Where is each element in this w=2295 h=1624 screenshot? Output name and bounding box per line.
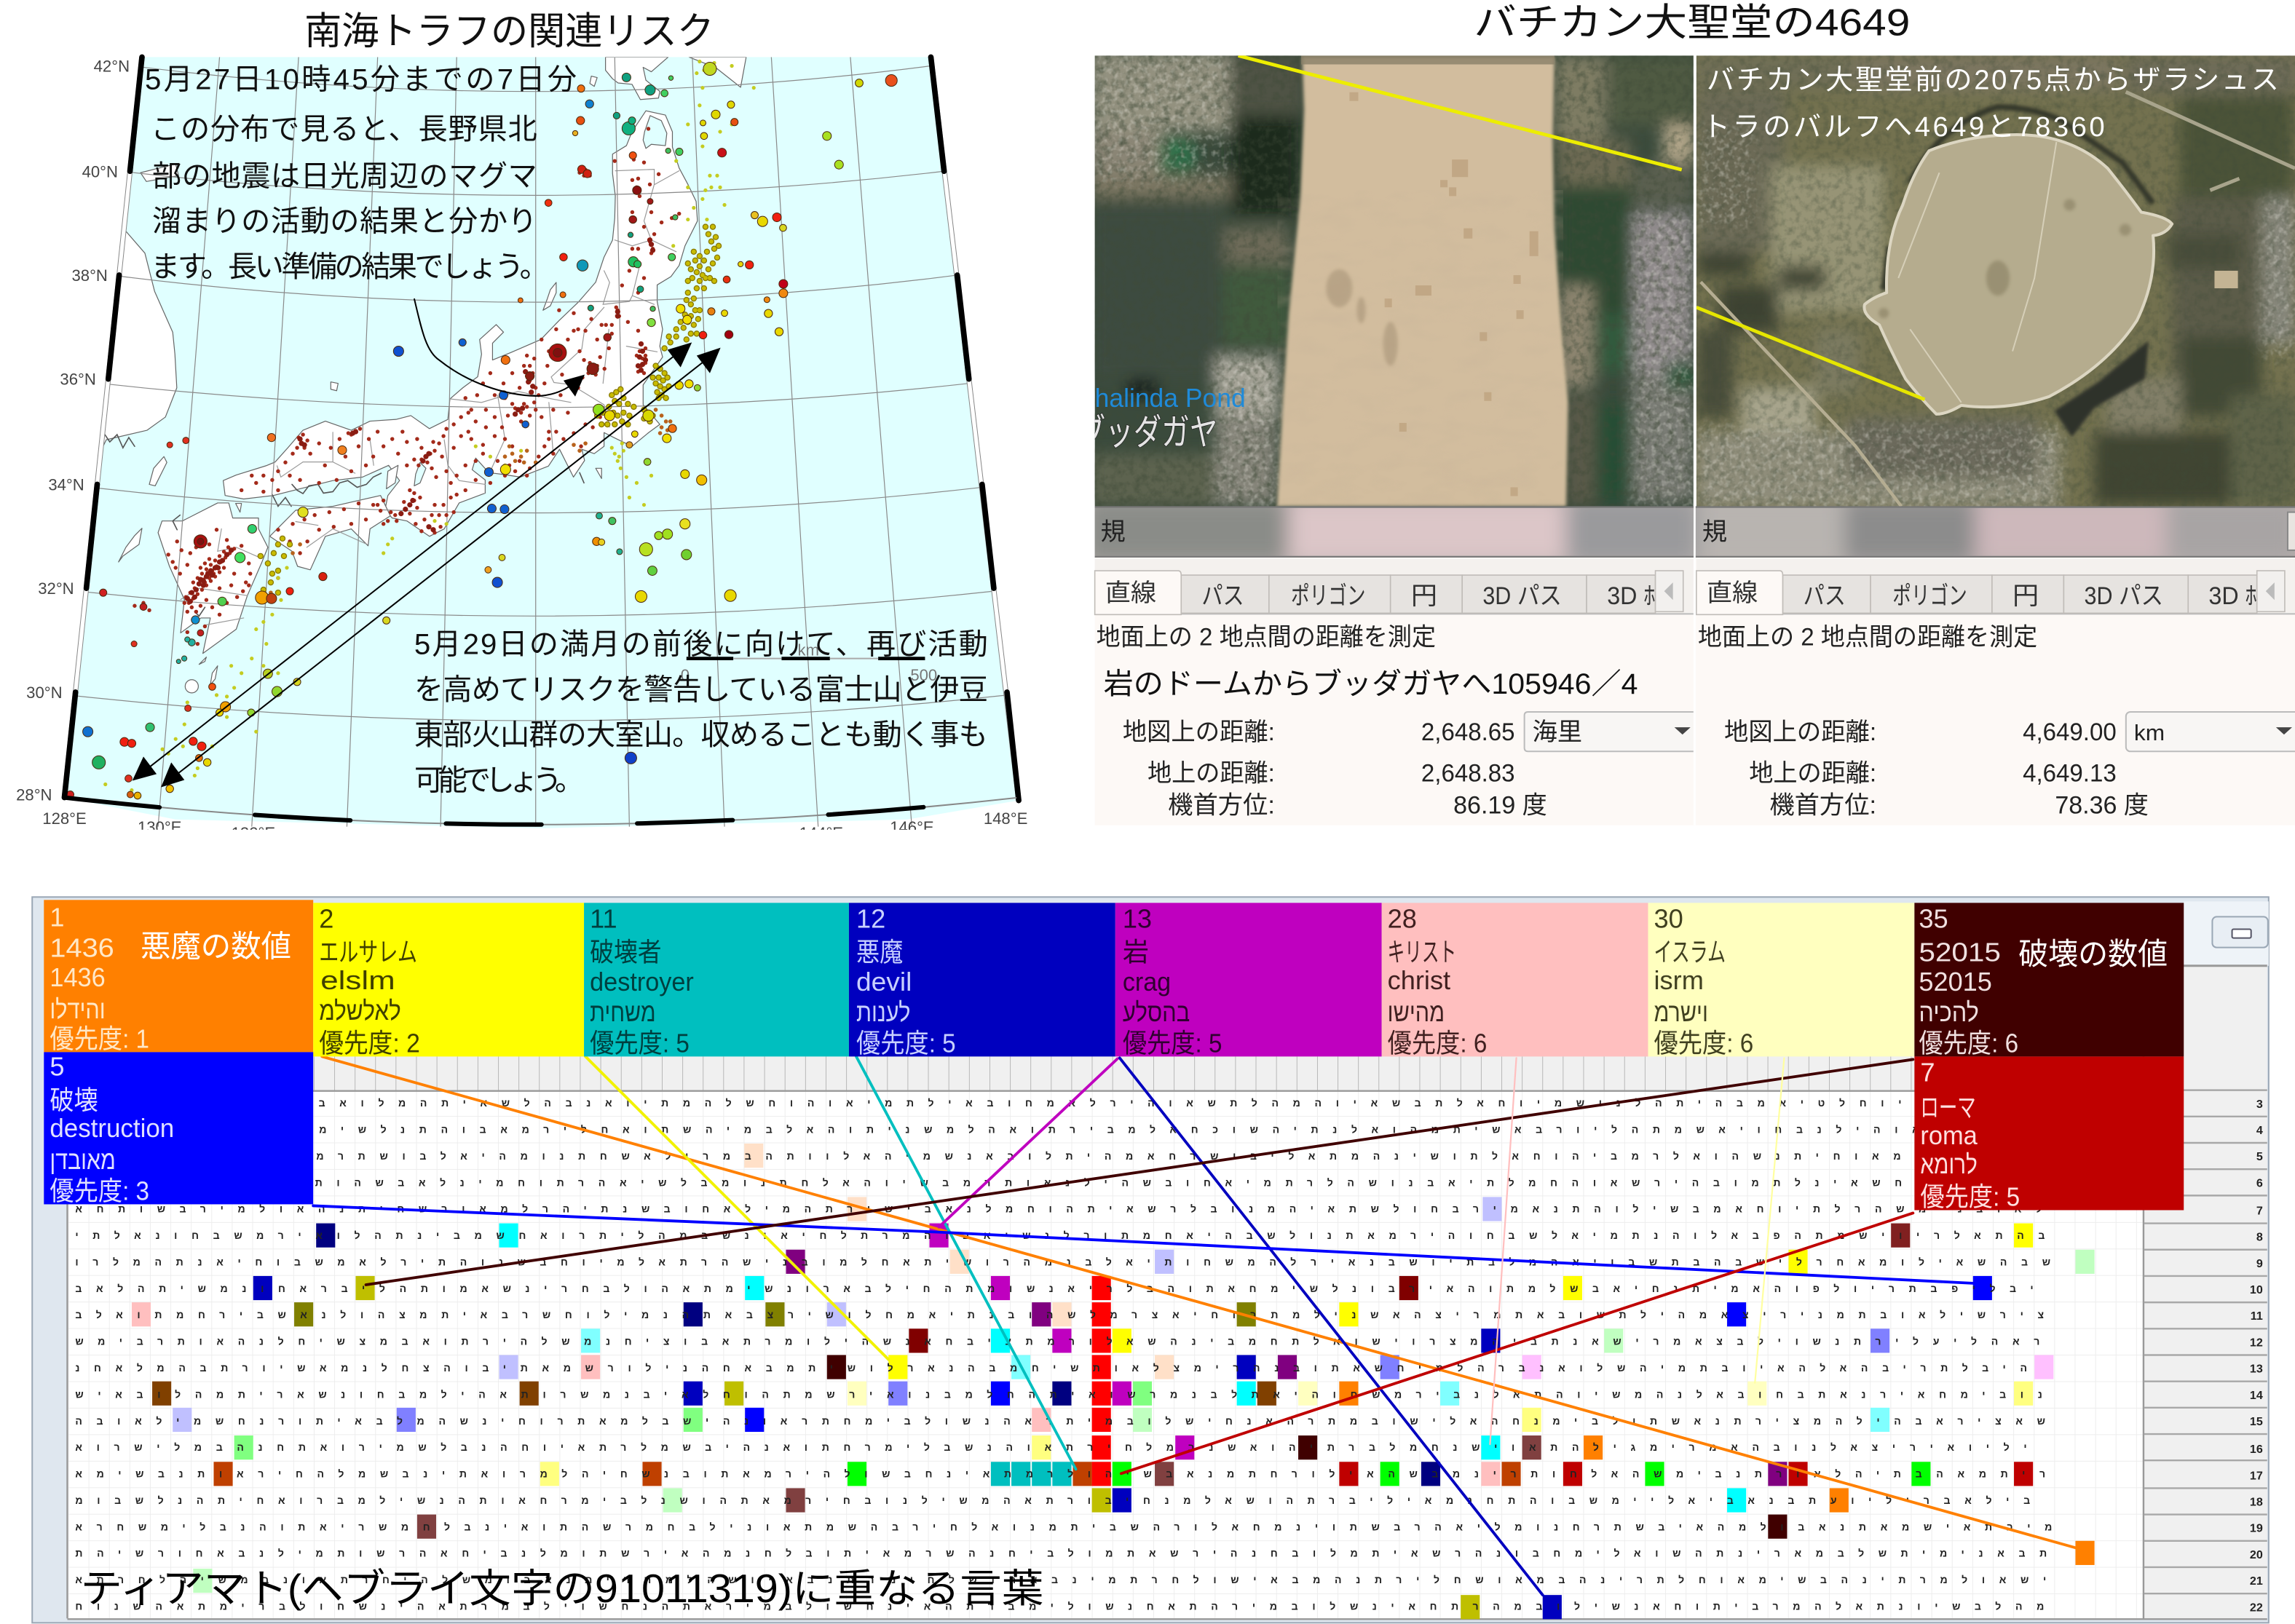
box: word 1 orange [44, 900, 313, 1053]
axis labels: 148°E [984, 809, 1027, 828]
Hebrew letter rows: בהתאלריוישמתהפבאלוהנתמיאלשבחוהירמאתנולשבהיאחמתורלנשיאבוהמרתלחיאונשבמהליתרואחשמבינתהלואירמשבחונאלתי [75, 1229, 2059, 1241]
satellite image: Bodh Gaya river [1078, 51, 1698, 507]
scale bar: km [798, 641, 819, 659]
Hebrew letter rows: מתהבלימאוחיתנשהואלרמביהוחאלתושינהמתאליבושרחאמהיתלובאנשמיהאלוותהבמרילאשחתנומהיאלבושתרמחאיהנלובשיאת [75, 1150, 2038, 1162]
box: word 5 blue: מאובדן [50, 1145, 116, 1175]
measurement readout left: 地図上の距離: [1123, 718, 1275, 746]
Hebrew letter rows: ישאולמרתינהבשימאוחלתרינהבמאושחלירתנהמבאישולחרתמינבאהושלחימרתנבאיושהלמחריתנאבומשלהיחרתאונבמשיהלחרתא [75, 1574, 2061, 1585]
text: Nagano note [151, 113, 549, 283]
measurement readout left: 岩のドームからブッダガヤへ105946／4 [1104, 668, 1638, 700]
Hebrew letter rows: צירשילאובתמניריצאמהילתשובאתמריצהאשנילמתבוחיאצרמלשהובנתיאמחלושירצבאתהנמילוחשרבאיתמצהולנאשבירחמתואלב [75, 1309, 2058, 1320]
map frame: graduated edges [64, 57, 1019, 825]
place label: pond: halinda Pond [1095, 383, 1246, 413]
minimize button [2212, 916, 2268, 948]
text: Nagano note: 部の地震は日光周辺のマグマ [152, 159, 537, 192]
tab bar right: 3D ﾎ [2208, 582, 2257, 610]
axis labels: 132°E [232, 824, 275, 842]
yellow line right [1696, 307, 1924, 400]
row numbers: 21 [2250, 1575, 2263, 1588]
Hebrew letter rows: מהלבשיונתאלהמרביתוחאנשילובמהרתחאינשלובמירהתאחנשולימברתהאינחשולבמיראתהנחשוילבמרתאהינשחולברימתאהשנוח [75, 1600, 2058, 1612]
box: word 13 purple: 優先度: 5 [1123, 1028, 1222, 1058]
scale bar: 500 [910, 666, 937, 684]
curved arrow to Nagano [414, 298, 585, 397]
tab bar right: パス [1804, 582, 1846, 610]
box: word 13 purple: 岩 [1123, 938, 1149, 967]
row numbers: 19 [2250, 1522, 2263, 1535]
axis labels: 40°N [82, 162, 118, 181]
box: word 1 orange: 優先度: 1 [50, 1023, 149, 1053]
fort moat [1884, 107, 2153, 290]
Hebrew letter rows: שבהשאילומאחרלישבהבתשבויאהמלבתיושבנאירלהמשחותיאלבנמהרושיתאחלמובנישהרתאלמיוחבשנוהתירלאמשבוחיאנתהמלרו [75, 1256, 2065, 1267]
box: word 7 dark red: ローマ [1920, 1093, 1976, 1122]
scale bar [681, 641, 937, 684]
row numbers: 9 [2256, 1257, 2263, 1270]
line: dark maroon word [366, 1059, 1913, 1285]
blurred toolbar strip: 規 [1702, 518, 1727, 546]
tab bar right: ポリゴン [1892, 582, 1967, 610]
text: Nagano note: この分布で見ると、長野県北 [151, 113, 537, 146]
tab bar left [1095, 559, 1694, 614]
box: word 7 dark red: 優先度: 5 [1920, 1181, 2020, 1211]
axis labels: 32°N [38, 579, 74, 598]
row numbers: 20 [2250, 1548, 2263, 1561]
box: word 30 pale yellow [1648, 903, 1914, 1058]
measurement readout right: km [2134, 721, 2165, 745]
box: word 35 maroon: 52015 [1919, 938, 2001, 967]
axis labels: 144°E [799, 824, 843, 842]
row numbers: 14 [2250, 1389, 2263, 1402]
box: word 30 pale yellow: isrm [1654, 965, 1704, 995]
measurement readout left: 機首方位: [1168, 792, 1275, 820]
box: word 2 yellow: 2 [319, 904, 333, 934]
axis labels: 34°N [48, 475, 84, 494]
Lake Biwa water [414, 462, 426, 486]
Hebrew letter rows: האתלימוחשאינלתמובהירשאוהחמלתיאבנושהלרתמיאחובשהילנאותרמבשיוהאלחתנומבלשיאהרתוחמינלאבשהותימרחאלובשנהי [75, 1176, 2057, 1188]
axis labels: 28°N [16, 786, 52, 804]
old road [1701, 282, 1901, 507]
box: word 11 teal: 破壊者 [590, 938, 662, 967]
letter grid [67, 1090, 2143, 1618]
earthquake dots: medium coloured [66, 62, 897, 799]
left title: 南海トラフの関連リスク [304, 10, 714, 52]
measurement readout left: 地上の距離: [1148, 759, 1275, 787]
axis labels: 130°E [138, 818, 181, 836]
Hebrew letter rows: יבליפבתריולפוהאמיתנחיאבשלמתוהאירבונלשימחאתוהבלריאנשומתהחילבארונשימתאהולבחרינשאמותהליבראחונמשיתהלאב [75, 1283, 2047, 1294]
window frame [32, 897, 2269, 1623]
box: word 2 yellow [313, 903, 584, 1058]
box: word 7 dark red: 7 [1920, 1058, 1935, 1088]
Hebrew letter rows: ראהליעלירתנשוילבצאמרישאנתביהמצרוישואלתחמבינהשאלורמתציבחאנשהילומרתאבוציחנמשלהירתואבמצשיחלנהאותרבימש [75, 1336, 2054, 1347]
row numbers: 13 [2250, 1363, 2263, 1376]
Mutsu bay water [643, 116, 667, 148]
box: word 12 dark blue: לענות [856, 997, 910, 1027]
box: word 2 yellow: elslm [320, 965, 395, 995]
box: word 5 blue: 5 [50, 1052, 64, 1082]
Hebrew letter rows: מיבתאישמאתנאבולמהאיבשתרחנומליאהרבשתוינמחאלורהשביתמנואלחירבהשמתאונילבחמרשהתואינבלחמשריאתוהנבלימשחרא [75, 1521, 2066, 1532]
earthquake dots: shallow small maroon [135, 129, 679, 644]
overlay text white: バチカン大聖堂前の2075点からザラシュス [1707, 65, 2279, 96]
box: word 28 pink: 優先度: 6 [1388, 1028, 1487, 1058]
caption: ティアマト(ヘブライ文字の91011319)に重なる言葉 [81, 1566, 1043, 1611]
box: word 28 pink: מהישו [1388, 997, 1445, 1027]
measurement readout left: 海里 [1533, 718, 1582, 746]
box: word 13 purple: 13 [1123, 904, 1152, 934]
text: full moon note: を高めてリスクを警告している富士山と伊豆 [414, 673, 988, 706]
tab bar left: ポリゴン [1291, 582, 1366, 610]
line: yellow word [585, 1056, 888, 1360]
line: dark blue word [1120, 1058, 1543, 1595]
box: word 28 pink: 28 [1388, 904, 1417, 934]
Hebrew letter rows: נובימחאירנאתבחובאלנהמשיוהתאלנבירמשחוהיאתלבנמרשואיתהחלמבנואירשמתהוחלאיבנמשרותאהילמבחונשאריתמהלובאיש [75, 1388, 2056, 1400]
measurement readout right: 機首方位: [1769, 792, 1876, 820]
box: word 7 dark red [1914, 1056, 2184, 1211]
Hebrew letter rows: בילאבריליועתבנאביאליימשבוהתחנמאיליברתהושאלמנחיבורתאהמשילנובחירמאתהושנלבימרחאותהנשילמברואחיתהנלשבומ [75, 1494, 2045, 1506]
box: word 28 pink [1382, 903, 1648, 1058]
box: word 7 dark red: לרומא [1920, 1149, 1978, 1179]
axis labels: 128°E [42, 809, 87, 828]
axis labels: 30°N [26, 684, 63, 702]
row numbers: 22 [2250, 1601, 2263, 1614]
measurement readout left: 地面上の 2 地点間の距離を測定 [1097, 624, 1436, 651]
place label: Bodh Gaya: ブッダガヤ [1078, 412, 1217, 453]
tab bar left: 直線 [1105, 579, 1156, 607]
rugged coastlines [104, 433, 584, 616]
earthquake dots: yellow cluster outlines [261, 227, 719, 593]
overlay text white: トラのバルフへ4649と78360 [1702, 111, 2105, 143]
box: word 5 blue: destruction [50, 1113, 174, 1143]
tab bar right [1696, 559, 2295, 614]
panel: Bible code matrix window [32, 897, 2269, 1623]
box: word 12 dark blue [849, 903, 1115, 1058]
box: word 35 maroon: 35 [1919, 904, 1948, 934]
earthquake dots: yellow-green scattered [106, 61, 754, 791]
measurement readout right: 78.36 度 [2055, 792, 2149, 820]
line: teal word [856, 1056, 1076, 1469]
row number column [2144, 966, 2267, 1620]
row numbers: 7 [2256, 1205, 2263, 1218]
tab bar right: 直線 [1707, 579, 1758, 607]
text: Nagano note: ます。長い準備の結果でしょう。 [151, 250, 549, 283]
tab bar left: 3D ﾎ [1607, 582, 1656, 610]
Hebrew letter rows: תבאנימיתשלבמארינתהשואלימחבונהרשאיתמלובחנהירשאתמולביחנהשרמאיתובלחנמהאירשתומלנביחאהרשותמילנבאחורשיהת [75, 1548, 2061, 1559]
Hebrew letter rows: לאובנימשהרלתיוחאמבשילוהתנאמירבחולשתאיהמנובלרשאיתהוחמלנאבישורתהמילאחובשנתיהרלמאובשחיתנהאולמירבשותחא [75, 1203, 2056, 1215]
panel: seismic map of Japan [0, 57, 1083, 859]
dark marsh patch [2055, 341, 2149, 437]
box: word 11 teal: destroyer [590, 967, 694, 997]
box: word 2 yellow: 優先度: 2 [319, 1028, 420, 1058]
row numbers: 6 [2256, 1176, 2263, 1189]
row numbers [2250, 1098, 2263, 1614]
box: word 28 pink: christ [1388, 965, 1450, 995]
box: word 12 dark blue: 悪魔 [856, 938, 903, 967]
text: full moon note [414, 628, 988, 797]
box: word 30 pale yellow: 30 [1654, 904, 1683, 934]
axis labels: 42°N [94, 58, 130, 76]
measurement readout left: 2,648.65 [1421, 718, 1515, 746]
box: word 35 maroon: להכיה [1919, 997, 1979, 1027]
box: word 12 dark blue: 優先度: 5 [856, 1028, 956, 1058]
measurement readout right: 地図上の距離: [1724, 718, 1876, 746]
box: word 30 pale yellow: 優先度: 6 [1654, 1028, 1753, 1058]
text: full moon note: 5月29日の満月の前後に向けて、再び活動 [414, 628, 988, 661]
earthquake blobs: dense maroon [187, 240, 653, 601]
row numbers: 8 [2256, 1231, 2263, 1244]
measurement panel background [1095, 558, 2295, 825]
earthquake dots: brown-orange mix [271, 410, 671, 593]
box: word 1 orange: 1436 [50, 933, 114, 963]
measurement readout right: 4,649.13 [2023, 759, 2117, 787]
row numbers: 12 [2250, 1336, 2263, 1349]
land masses [88, 57, 746, 693]
line: blue word [313, 1205, 1975, 1283]
fort [1864, 135, 2172, 414]
box: word 7 dark red: roma [1920, 1120, 1978, 1150]
link lines [313, 1056, 2077, 1595]
axis labels: 146°E [890, 818, 934, 836]
box: word 28 pink: キリスト [1388, 938, 1456, 967]
box: word 11 teal: משחית [590, 997, 656, 1027]
tab bar left: パス [1201, 582, 1244, 610]
measurement readout left: 86.19 度 [1453, 792, 1547, 820]
scale bar: 0 [681, 666, 690, 684]
box: word 12 dark blue: 12 [856, 904, 885, 934]
axis labels: 38°N [71, 266, 108, 285]
row numbers: 10 [2250, 1283, 2263, 1296]
box: word 35 maroon: 破壊の数値 [2018, 937, 2168, 971]
row numbers: 5 [2256, 1150, 2263, 1163]
line: pale yellow word [1755, 1058, 1784, 1383]
measurement readout left: 2,648.83 [1421, 759, 1515, 787]
row numbers: 15 [2250, 1415, 2263, 1428]
measurement readout right [1698, 624, 2295, 820]
box: word 13 purple: בהסלע [1123, 997, 1190, 1027]
measurement readout left [1097, 624, 1694, 820]
box: word 35 maroon [1914, 903, 2184, 1058]
Hebrew letter rows [75, 1097, 2066, 1612]
tab bar right: 3D パス [2085, 582, 2163, 610]
box: word 5 blue: 優先度: 3 [50, 1176, 149, 1205]
box: word 2 yellow: エルサレム [319, 938, 417, 967]
row numbers: 11 [2251, 1310, 2263, 1323]
diagonal double arrow 1 [133, 342, 692, 780]
measurement readout right: 4,649.00 [2023, 718, 2117, 746]
yellow line left [1239, 55, 1682, 170]
diagonal double arrow 2 [161, 348, 721, 788]
box: word 11 teal: 優先度: 5 [590, 1028, 690, 1058]
overlay text white [1702, 65, 2279, 143]
panel: Google Earth measurement screens [1078, 51, 2295, 825]
Hebrew letter rows: היבלתריבהאלהאיובתמיהשלואנברהלמיחשאתובנהרימצלאותשיחמבהנארלושיתמבאחהנילורשמאתיבוהצחלנמאשיורתבהמלאחנ [75, 1362, 2042, 1374]
row numbers: 18 [2250, 1496, 2263, 1509]
prefecture borders [181, 170, 679, 625]
map sea background [64, 57, 1019, 828]
Hebrew letter rows: תשנלאמיוחלטיאמבהיתהלנושמיוחאלתבשאיוהמהלתשאוהירלאמחובאילתמיאוהוחשלהמתיואנבהלשאיתהמלואבחשירתהמלואיה [75, 1097, 2042, 1109]
Hebrew letter rows: אמהתלאוהילנבחויאשמתהליורבאשיתמהואלנתיהשוכחאלמבירתואהלמשניתוהאלבמיהשתואחלירמאבוהתנלשימאויתהלמבאשוה [75, 1124, 2039, 1136]
axis labels [16, 58, 1027, 842]
axis labels: 36°N [60, 371, 96, 389]
box: word 5 blue: 破壊 [50, 1085, 98, 1115]
tab bar right: 円 [2012, 582, 2039, 610]
Hebrew letter rows: שאציראבהילהמצירתנאשתולבימנחהאלישובמתרהאנחישלובמיתראהנשולבימחתראונהישבלמאתרוחינשהמלבאיתורנחשמילאובה [75, 1415, 2060, 1427]
tab bar left: 3D パス [1482, 582, 1562, 610]
graticule [68, 57, 1007, 827]
box: word 30 pale yellow: וישרמ [1654, 997, 1708, 1027]
text: Nagano note: 溜まりの活動の結果と分かり [152, 205, 537, 238]
row numbers: 4 [2256, 1124, 2263, 1137]
blurred toolbar strip: 規 [1101, 518, 1126, 546]
measurement readout right: 地上の距離: [1749, 759, 1876, 787]
tab bar left: 円 [1411, 582, 1437, 610]
blurred toolbar strip [1083, 498, 2295, 563]
box: word 30 pale yellow: イスラム [1654, 938, 1726, 967]
line: red word [1121, 1213, 1913, 1473]
text: full moon note: 東部火山群の大室山。収めることも動く事も [414, 718, 988, 751]
cut map bottom edge [0, 830, 1083, 859]
box: word 5 blue [44, 1052, 313, 1205]
text: data period: 5月27日10時45分までの7日分 [145, 63, 577, 96]
satellite image: Balkh fort [1696, 55, 2295, 508]
highlighted letter cells [132, 1144, 2095, 1619]
box: word 2 yellow: לאלשלמ [319, 996, 401, 1026]
box: word 12 dark blue: devil [856, 967, 912, 997]
Hebrew letter rows: יליואיריצאלנובהאמרימגילהתאוישנחמלברתיהואשנבמלחירתאוהנשבלימרחתואנהיבשמלרתאיוחהנבלשמירואתחנהבמלישרוא [75, 1441, 2041, 1453]
line: orange word [322, 1056, 2077, 1548]
box: word 35 maroon: 優先度: 6 [1919, 1028, 2018, 1058]
box: word 1 orange: 悪魔の数値 [141, 930, 291, 964]
row numbers: 3 [2256, 1098, 2263, 1111]
line: pink word [1490, 1058, 1517, 1444]
measurement readout right: 地面上の 2 地点間の距離を測定 [1698, 624, 2037, 651]
Hebrew letter rows: ריתמאהבתיהלאורתנבימשהאלחותרינמבשהאילורחתמנאבשיהולרמתאינחבשולהירמאתובנשחיהלמרואתינבשמלהחיראותנבשימא [75, 1468, 2060, 1480]
box: word 13 purple [1115, 903, 1382, 1058]
box: word 11 teal: 11 [590, 904, 617, 934]
text: full moon note: 可能でしょう。 [414, 764, 584, 797]
row numbers: 16 [2250, 1443, 2263, 1456]
right title: バチカン大聖堂の4649 [1474, 1, 1910, 44]
box: word 13 purple: crag [1123, 967, 1171, 997]
box: word 1 orange: 1436 [50, 962, 106, 992]
box: word 11 teal [584, 903, 849, 1058]
row numbers: 17 [2250, 1469, 2263, 1482]
box: word 1 orange: 1 [50, 902, 64, 932]
box: word 35 maroon: 52015 [1919, 967, 1992, 997]
line: purple word [939, 1058, 1118, 1227]
box: word 1 orange: והידלו [50, 994, 106, 1024]
